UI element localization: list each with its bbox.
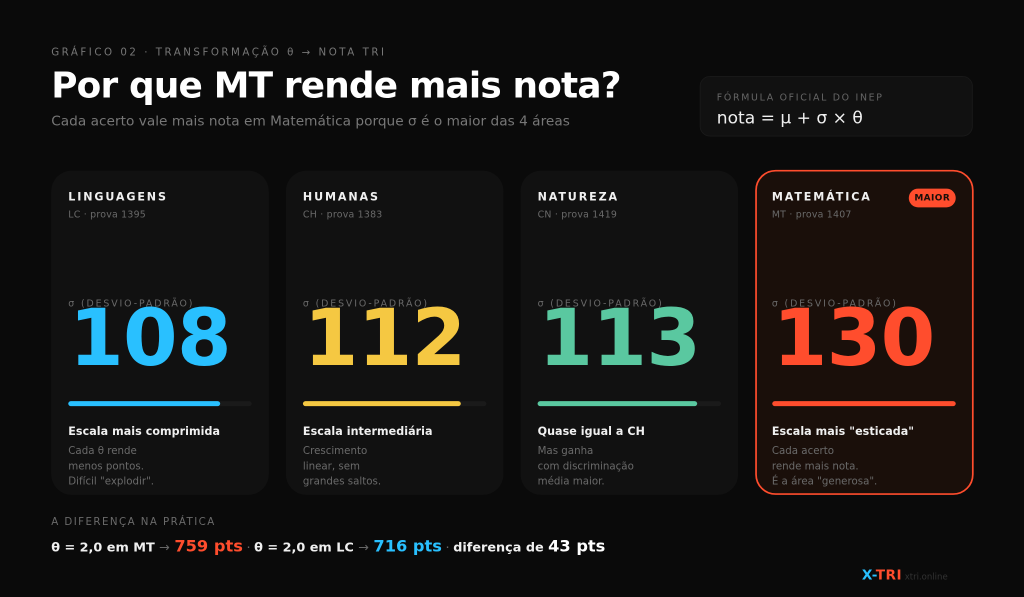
description: É a área "generosa".: [772, 475, 877, 487]
exam code: LC · prova 1395: [68, 209, 146, 220]
sigma label: σ (DESVIO-PADRÃO): [538, 298, 664, 309]
description: média maior.: [538, 475, 605, 487]
sigma value: 112: [304, 293, 466, 384]
title: Por que MT rende mais nota?: [51, 64, 621, 105]
description: Crescimento: [303, 444, 367, 456]
description: [538, 444, 634, 487]
difference label: A DIFERENÇA NA PRÁTICA: [51, 515, 216, 527]
area name: LINGUAGENS: [68, 191, 168, 204]
badge: [909, 189, 956, 207]
description: [303, 444, 381, 487]
bar: [68, 401, 252, 406]
card heading: Escala mais "esticada": [772, 425, 914, 438]
bar: [538, 401, 721, 406]
brand: X-TRI xtri.online: [862, 567, 948, 583]
area name: HUMANAS: [303, 191, 380, 204]
description: [772, 444, 877, 487]
card heading: Escala mais comprimida: [68, 425, 220, 438]
sigma value: 113: [538, 293, 700, 384]
description: linear, sem: [303, 460, 360, 471]
sigma value: 108: [69, 293, 231, 384]
formula box: [700, 76, 973, 137]
panel: linguagens: [51, 170, 269, 495]
area name: NATUREZA: [538, 191, 619, 204]
exam code: MT · prova 1407: [772, 209, 852, 220]
panel: matemática: [755, 170, 973, 495]
description: Cada acerto: [772, 444, 834, 456]
bar: [772, 401, 955, 406]
description: [68, 444, 154, 487]
description: menos pontos.: [68, 460, 144, 471]
badge: MAIOR: [914, 193, 950, 203]
panel: natureza: [521, 170, 738, 495]
description: Difícil "explodir".: [68, 475, 154, 487]
panel: humanas: [286, 170, 503, 495]
difference line: θ = 2,0 em MT → 759 pts · θ = 2,0 em LC → 716 pts · diferença de 43 pts: [51, 537, 605, 556]
description: com discriminação: [538, 460, 634, 471]
exam code: CH · prova 1383: [303, 209, 382, 220]
card heading: Escala intermediária: [303, 425, 433, 438]
formula label: FÓRMULA OFICIAL DO INEP: [717, 92, 884, 103]
sigma value: 130: [773, 293, 935, 384]
exam code: CN · prova 1419: [538, 209, 617, 220]
subtitle: Cada acerto vale mais nota em Matemática porque σ é o maior das 4 áreas: [51, 113, 570, 129]
sigma label: σ (DESVIO-PADRÃO): [303, 298, 429, 309]
description: grandes saltos.: [303, 475, 381, 487]
description: Cada θ rende: [68, 444, 137, 456]
bar: [303, 401, 486, 406]
area name: MATEMÁTICA: [772, 191, 872, 204]
sigma label: σ (DESVIO-PADRÃO): [68, 298, 194, 309]
eyebrow: GRÁFICO 02 · TRANSFORMAÇÃO θ → NOTA TRI: [51, 46, 387, 58]
description: Mas ganha: [538, 444, 593, 456]
card heading: Quase igual a CH: [538, 425, 645, 438]
sigma label: σ (DESVIO-PADRÃO): [772, 298, 898, 309]
formula: nota = μ + σ × θ: [717, 108, 863, 128]
description: rende mais nota.: [772, 460, 859, 471]
